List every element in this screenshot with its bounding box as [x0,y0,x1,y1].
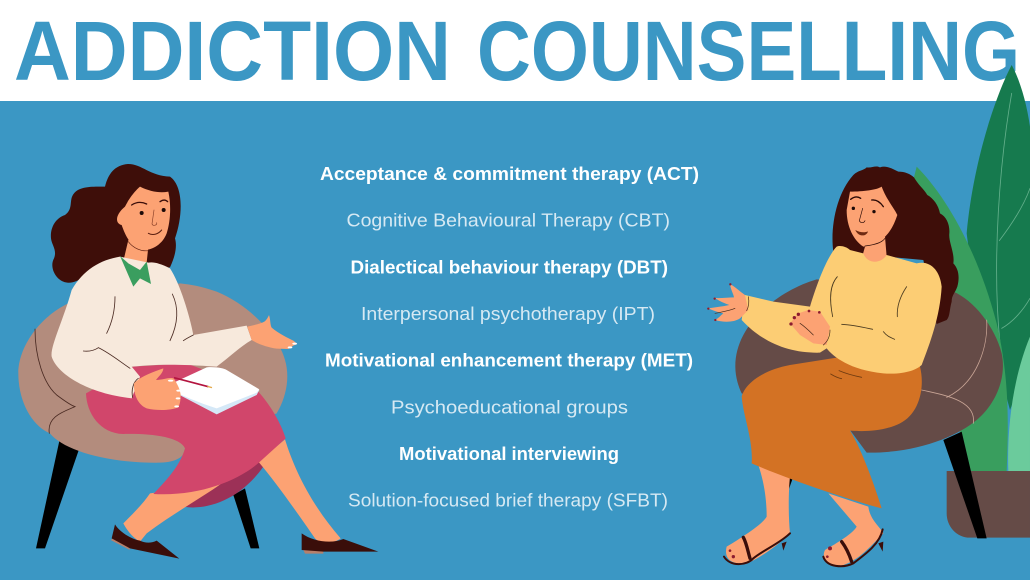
hair [51,164,181,283]
collar [120,256,151,287]
back leg [123,483,222,542]
left leg and sandal [724,465,790,564]
hands [134,315,297,410]
title banner [0,0,1030,101]
right leg and sandal [823,493,883,567]
front leg [258,439,341,543]
hair [832,166,959,324]
sweater [742,246,942,374]
plant [913,65,1030,538]
notebook [165,367,259,414]
skirt [742,358,922,508]
leaf: light [1008,337,1030,472]
neck [124,240,148,267]
armchair [18,283,287,463]
illustration: client seated on chair [707,166,1003,567]
list of therapies: Dialectical behaviour therapy (DBT) [350,256,668,277]
face [117,187,170,250]
list of therapies [320,163,699,511]
leaf: dark [967,65,1030,410]
title banner: ADDICTION [14,4,451,98]
pot [947,471,1030,538]
right shoe [302,533,378,554]
list of therapies: Solution-focused brief therapy (SFBT) [348,490,668,511]
list of therapies: Motivational interviewing [399,443,619,464]
chair legs [788,432,987,538]
illustration: counsellor seated on chair with notebook [18,164,378,559]
face [847,187,897,247]
list of therapies: Acceptance & commitment therapy (ACT) [320,163,699,184]
hands [707,283,832,558]
left shoe [111,524,179,559]
list of therapies: Psychoeducational groups [391,396,628,417]
skirt shadow [183,458,263,507]
list of therapies: Cognitive Behavioural Therapy (CBT) [346,210,670,231]
mouth [855,230,868,235]
sweater [52,257,252,398]
leaf: mid [913,167,1008,472]
list of therapies: Interpersonal psychotherapy (IPT) [361,303,655,324]
list of therapies: Motivational enhancement therapy (MET) [325,350,693,371]
chair legs [36,441,259,548]
neck [863,237,887,263]
chair [735,279,1003,453]
skirt [86,363,286,494]
